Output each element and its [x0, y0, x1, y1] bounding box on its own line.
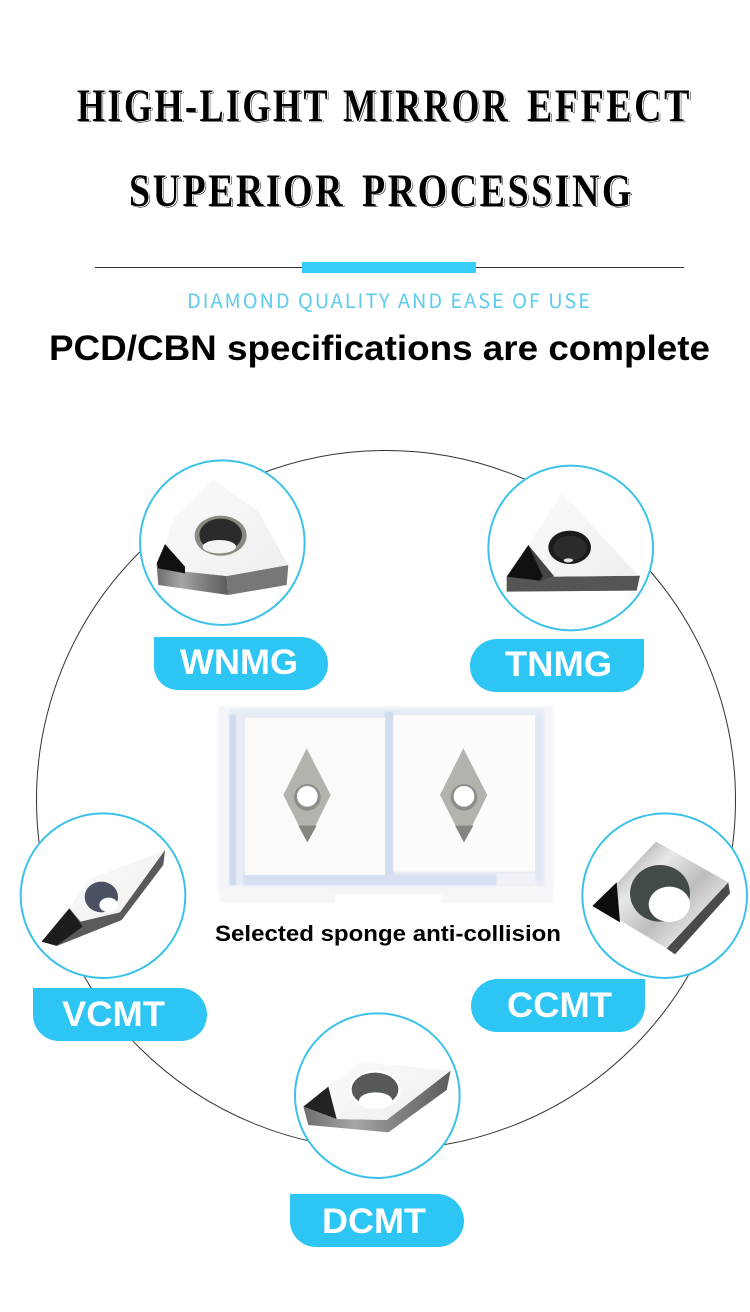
label: TNMG: [470, 639, 644, 692]
label: CCMT: [471, 979, 645, 1032]
panel: DCMT: [290, 1013, 464, 1247]
label: TNMG: TNMG: [505, 645, 612, 684]
icon: left insert: [283, 748, 331, 842]
photo: insert box: [218, 706, 553, 903]
label: WNMG: [154, 637, 328, 690]
caption: Selected sponge anti-collision: [215, 921, 561, 946]
label: VCMT: VCMT: [62, 995, 165, 1034]
title line 2: PROCESSING: [362, 165, 634, 217]
heading: PCD/CBN specifications are complete: [49, 329, 710, 368]
title line 2: [129, 165, 634, 217]
title line 1: [77, 80, 692, 132]
circle: VCMT insert: [21, 813, 185, 978]
icon: right insert: [440, 748, 487, 842]
circle: WNMG insert: [140, 460, 305, 625]
panel: VCMT: [21, 813, 207, 1041]
divider with blue bar: [95, 262, 684, 273]
label: WNMG: WNMG: [180, 643, 298, 682]
panel: WNMG: [140, 460, 328, 690]
title line 2: SUPERIOR: [129, 165, 345, 217]
label: VCMT: [33, 988, 207, 1041]
title line 1: EFFECT: [527, 80, 692, 132]
subtitle: DIAMOND QUALITY AND EASE OF USE: [187, 285, 590, 314]
circle: TNMG insert: [488, 466, 653, 630]
label: DCMT: [290, 1194, 464, 1247]
panel: TNMG: [470, 466, 653, 692]
large ring: [36, 450, 736, 1150]
title line 1: MIRROR: [343, 80, 510, 132]
label: CCMT: CCMT: [507, 986, 612, 1025]
panel: CCMT: [471, 813, 747, 1032]
label: DCMT: DCMT: [322, 1202, 426, 1241]
circle: CCMT insert: [582, 813, 747, 978]
panel: sponge box: [215, 706, 561, 946]
circle: DCMT insert: [295, 1013, 460, 1178]
title line 1: HIGH-LIGHT: [77, 80, 330, 132]
